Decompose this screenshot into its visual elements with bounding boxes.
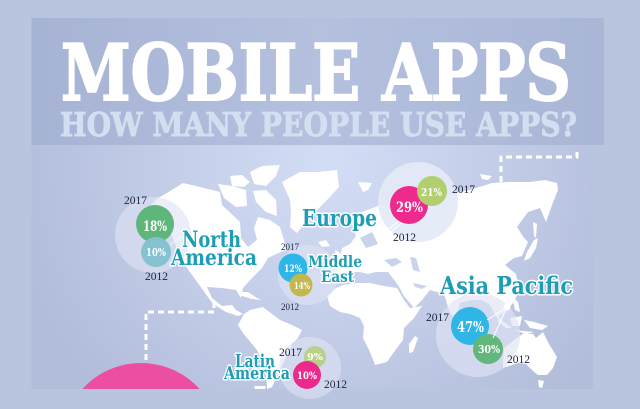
land: Svalbard and Arctic islands — [358, 174, 492, 192]
panel: map background — [32, 145, 593, 389]
land: Japan and Sakhalin — [524, 222, 538, 261]
region: Asia Pacific — [426, 271, 573, 377]
region: Latin America — [223, 337, 347, 399]
region: Europe: 29% — [396, 200, 423, 216]
region: Asia Pacific: Asia Pacific — [439, 271, 573, 300]
land: Greenland — [282, 170, 339, 233]
world map — [150, 165, 558, 389]
land: Falkland Islands — [254, 386, 266, 389]
land: North America — [150, 183, 286, 316]
land: Canadian Arctic islands — [218, 165, 280, 216]
dashed connector: bottom left — [146, 300, 214, 360]
region: North America: 2012 — [145, 271, 168, 283]
region: North America: 18% — [143, 219, 167, 235]
region: Asia Pacific: 2017 — [426, 312, 449, 324]
region: Latin America: Latin — [235, 351, 275, 372]
region: Latin America: America — [223, 363, 290, 384]
region: North America: 10% — [146, 246, 166, 259]
region: Latin America: 2012 — [324, 379, 347, 391]
region: Europe: 2012 — [393, 232, 416, 244]
pink semicircle — [82, 363, 200, 389]
land: Eurasia — [325, 180, 558, 320]
region: Middle East — [278, 242, 362, 312]
land: Australia — [503, 332, 557, 375]
region: North America: America — [170, 245, 257, 271]
dashed connector: top right — [501, 148, 577, 182]
region: Latin America: 2017 — [279, 347, 302, 359]
land: South America — [238, 307, 302, 389]
panel: header band — [32, 18, 604, 145]
region: Middle East: 2017 — [281, 242, 300, 252]
land: Caribbean — [237, 292, 262, 300]
region: Europe — [302, 162, 475, 244]
region: Europe: 2017 — [452, 184, 475, 196]
region: Asia Pacific: 47% — [457, 319, 484, 336]
land: Southeast Asia islands — [498, 299, 548, 334]
water: inland seas — [360, 232, 427, 289]
region: Europe: Europe — [302, 205, 377, 232]
region: Middle East: 12% — [284, 263, 302, 275]
land: UK and Iceland — [318, 240, 340, 256]
region: Latin America: 9% — [307, 352, 323, 363]
region: Middle East: East — [321, 267, 355, 286]
region: Middle East: 2012 — [281, 302, 299, 312]
land: Madagascar — [409, 336, 418, 353]
region: Middle East: Middle — [308, 252, 362, 271]
land: Africa — [327, 283, 422, 365]
region: North America — [115, 195, 257, 283]
region: North America: North — [182, 227, 241, 253]
land: Tasmania — [538, 380, 544, 388]
region: Latin America: 10% — [297, 370, 317, 382]
region: Middle East: 14% — [294, 281, 310, 292]
region: Asia Pacific: 2012 — [507, 354, 530, 366]
region: North America: 2017 — [124, 195, 147, 207]
region: Europe: 21% — [421, 185, 442, 199]
region: Asia Pacific: 30% — [478, 342, 500, 356]
